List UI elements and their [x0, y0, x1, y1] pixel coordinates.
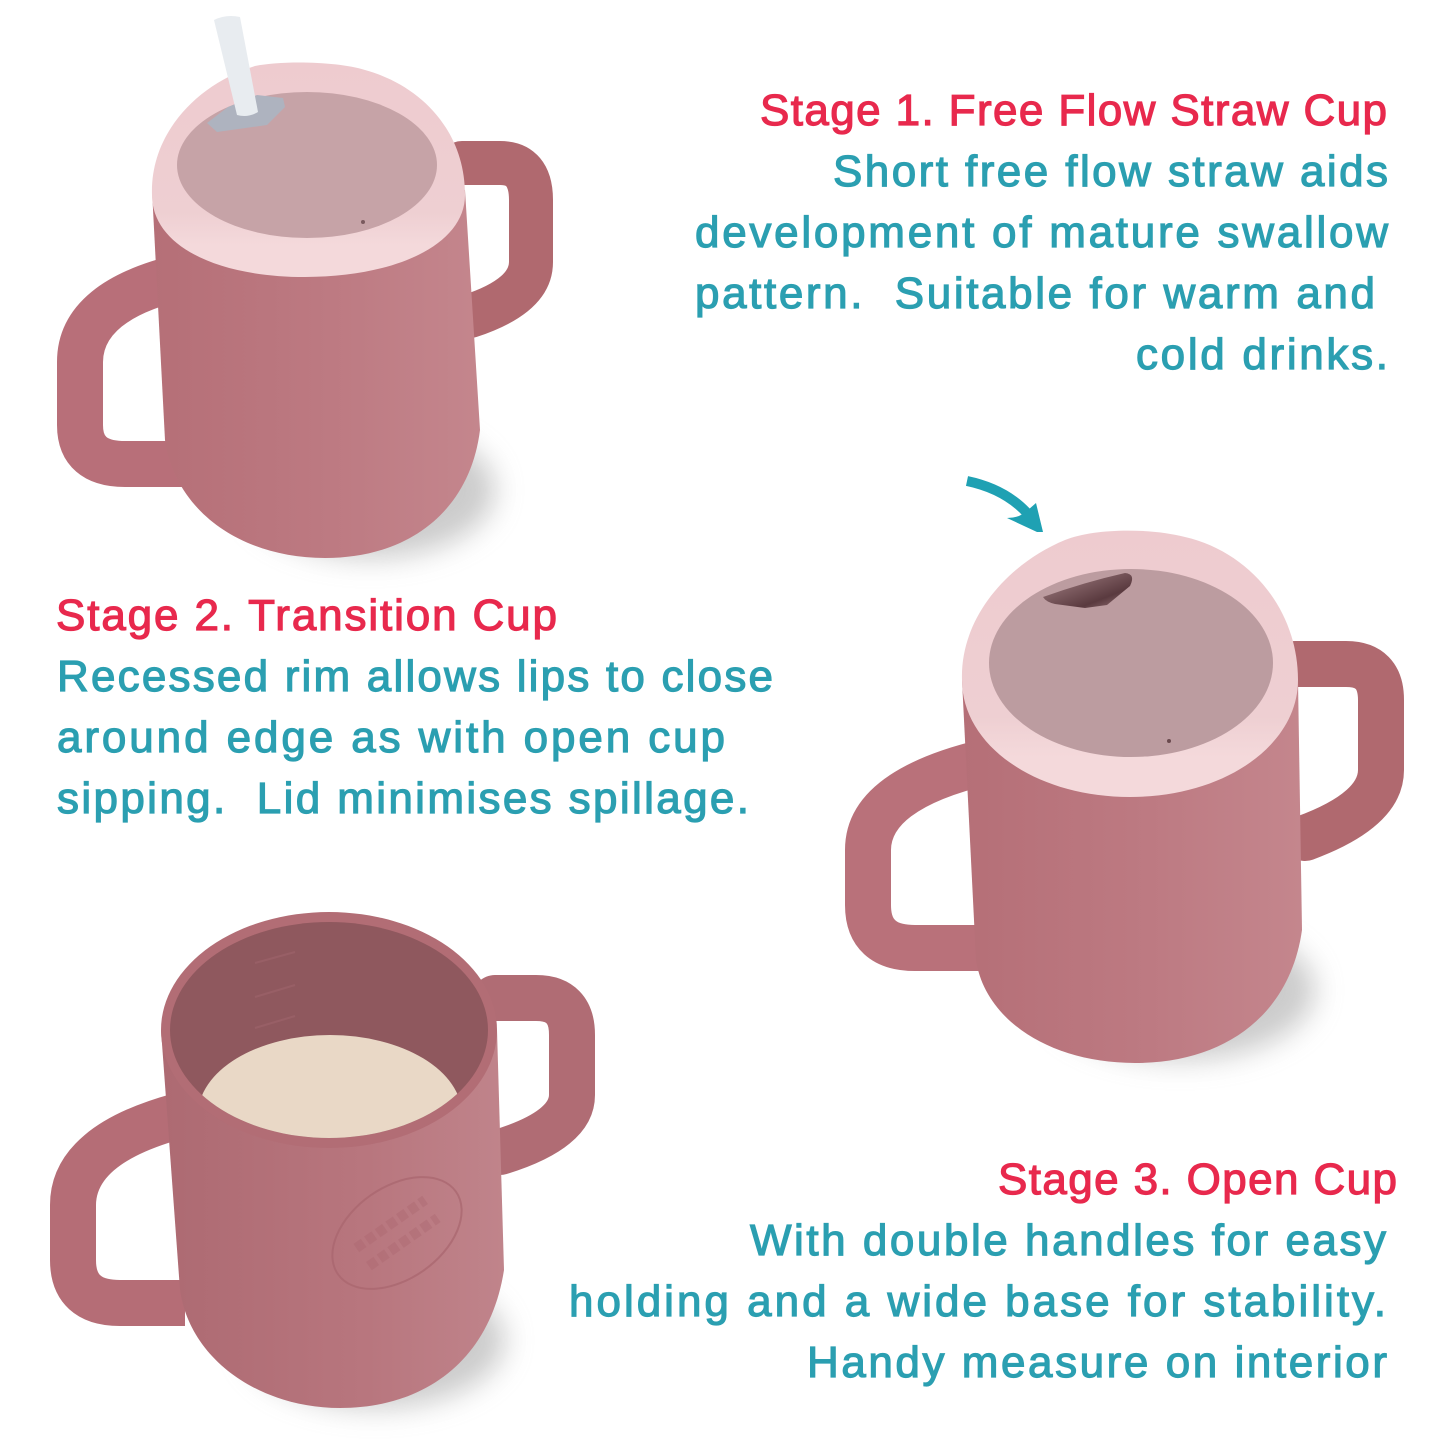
cup: stage 3 open cup [73, 912, 572, 1408]
icon: embossed logo [312, 1154, 482, 1312]
cup: stage 2 transition cup [868, 481, 1381, 1063]
icon: cup 2 spout opening [1043, 573, 1132, 608]
text block: stage 3 [569, 1155, 1397, 1387]
icon: cup 2 body [962, 680, 1302, 1063]
icon: cup 1 lid rim [152, 63, 465, 277]
text block: stage 1 [695, 86, 1388, 379]
text block: stage 1: cold drinks. [1136, 330, 1388, 379]
measure markings [255, 952, 295, 1028]
icon: cup 2 right handle [1295, 664, 1381, 838]
text block: stage 2: around edge as with open cup [57, 713, 725, 762]
icon: cup 2 left handle [868, 762, 985, 948]
icon: cup 1 lid recess [177, 92, 437, 238]
icon: cup 3 milk [202, 1035, 458, 1138]
icon: cup 2 lid rim [962, 531, 1298, 797]
icon: cup 1 right handle [462, 163, 531, 316]
cup: stage 1 free flow straw cup [80, 16, 531, 558]
icon: cup 1 body [152, 190, 480, 558]
icon: cup 1 straw [207, 16, 285, 132]
icon: cup 3 body [161, 1030, 504, 1408]
icon: cup 3 left handle [73, 1116, 185, 1303]
text block: stage 2: Recessed rim allows lips to close [57, 652, 773, 701]
icon: arrow pointing to lid [967, 481, 1043, 532]
icon: cup 1 air hole [361, 220, 365, 224]
text block: stage 3: holding and a wide base for stability. [569, 1277, 1386, 1326]
icon: cup 1 left handle [80, 276, 190, 464]
text block: stage 1: pattern. Suitable for warm and [695, 269, 1375, 318]
text block: stage 2 [56, 591, 773, 823]
text block: stage 3: Handy measure on interior [807, 1338, 1387, 1387]
icon: cup 3 right handle [495, 998, 572, 1152]
text block: stage 3: With double handles for easy [750, 1216, 1386, 1265]
text block: stage 1: Short free flow straw aids [833, 147, 1388, 196]
icon: cup 3 interior [170, 922, 488, 1138]
heading: stage 2: Stage 2. Transition Cup [56, 591, 557, 640]
icon: cup 3 rim [161, 912, 497, 1148]
text block: stage 1: development of mature swallow [695, 208, 1388, 257]
icon: cup 2 lid recess [989, 569, 1273, 757]
heading: stage 1: Stage 1. Free Flow Straw Cup [760, 86, 1387, 135]
text block: stage 2: sipping. Lid minimises spillage. [57, 774, 749, 823]
heading: stage 3: Stage 3. Open Cup [998, 1155, 1397, 1204]
icon: cup 2 air hole [1167, 739, 1171, 743]
